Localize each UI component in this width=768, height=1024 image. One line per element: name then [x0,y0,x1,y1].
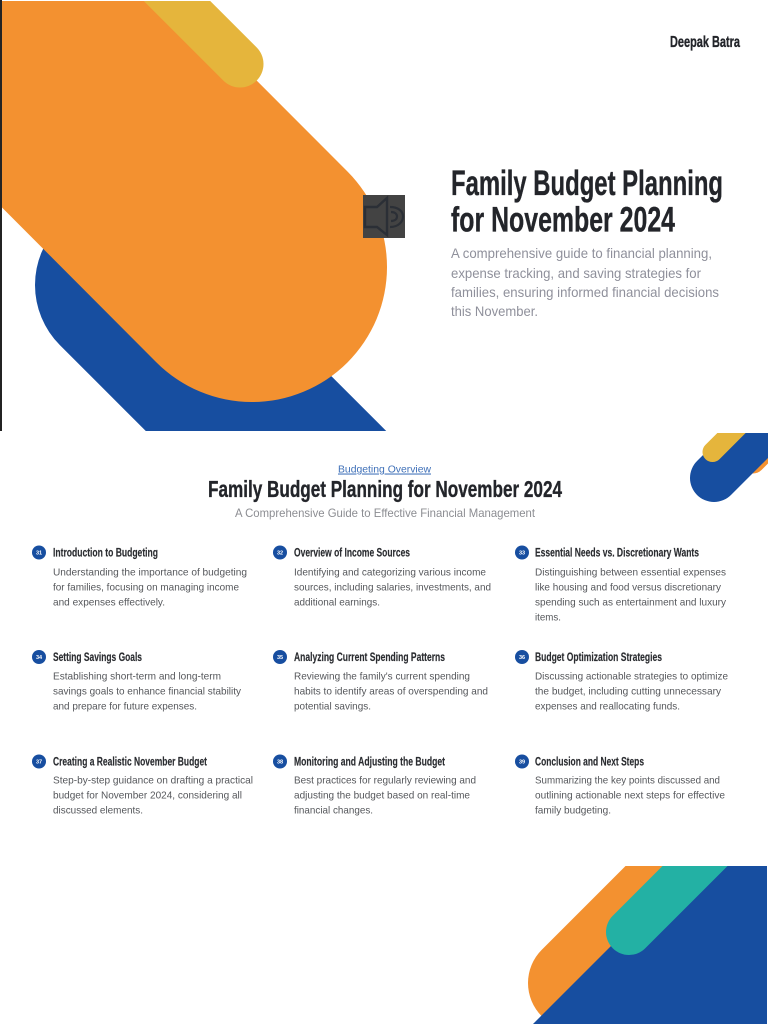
item 7: budget for November 2024, considering all [53,790,242,802]
item 8: Monitoring and Adjusting the Budget [294,754,445,768]
item 3: spending such as entertainment and luxury [535,597,727,609]
item 2 [273,546,491,609]
item 1: 31 [36,550,42,556]
item 1: for families, focusing on managing income [53,582,239,594]
item 1: Introduction to Budgeting [53,546,158,560]
cover subtitle [451,245,719,319]
item 6: 36 [519,655,525,661]
item 5 [273,650,488,713]
eyebrow link: Budgeting Overview [338,464,431,476]
item 5: Analyzing Current Spending Patterns [294,650,445,664]
corner capsules [712,392,768,478]
item 7 [32,754,253,817]
decorative capsules [2,1,387,431]
cover subtitle: A comprehensive guide to financial planning, [451,245,712,261]
item 2: Identifying and categorizing various income [294,567,486,579]
item 4 [32,650,242,713]
item 6 [515,650,728,713]
cover subtitle: expense tracking, and saving strategies for [451,265,701,281]
item 3: 33 [519,550,525,556]
item 3: Distinguishing between essential expenses [535,567,726,579]
item 1 [32,546,247,609]
cover title: for November 2024 [451,200,675,240]
item 6: Discussing actionable strategies to optimize [535,671,728,683]
item 5: potential savings. [294,701,371,713]
item 2: Overview of Income Sources [294,546,410,560]
item 7: 37 [36,760,42,766]
left edge bar [0,0,2,431]
cover subtitle: this November. [451,303,538,319]
item 8: financial changes. [294,805,373,817]
item 7: Creating a Realistic November Budget [53,754,207,768]
item 4: Establishing short-term and long-term [53,671,221,683]
item 8 [273,754,476,817]
item 1: Understanding the importance of budgeting [53,567,247,579]
cover title [451,164,723,240]
item 5: habits to identify areas of overspending and [294,686,488,698]
item 9: family budgeting. [535,805,611,817]
item 7: discussed elements. [53,805,143,817]
item 8: 38 [277,760,283,766]
item 9: Conclusion and Next Steps [535,754,644,768]
item 4: 34 [36,655,43,661]
item 7: Step-by-step guidance on drafting a practical [53,775,253,787]
panel: budgeting overview [32,392,768,817]
item 2: additional earnings. [294,597,380,609]
section heading: Family Budget Planning for November 2024 [208,476,562,502]
item 9 [515,754,725,817]
item 1: and expenses effectively. [53,597,165,609]
item 6: the budget, including cutting unnecessary [535,686,722,698]
item 3: items. [535,612,561,624]
item 2: sources, including salaries, investments, and [294,582,491,594]
item 9: Summarizing the key points discussed and [535,775,720,787]
item 4: savings goals to enhance financial stability [53,686,242,698]
section subtitle: A Comprehensive Guide to Effective Financial Management [235,506,536,520]
item 9: outlining actionable next steps for effective [535,790,725,802]
decorative corner shapes [528,866,767,1024]
panel: cover slide [0,0,740,431]
icon: speaker [363,195,405,238]
item 8: adjusting the budget based on real-time [294,790,470,802]
item 4: Setting Savings Goals [53,650,142,664]
item 6: expenses and reallocating funds. [535,701,680,713]
item 4: and prepare for future expenses. [53,701,197,713]
item 5: 35 [277,655,283,661]
item 9: 39 [519,760,525,766]
item 3 [515,546,727,624]
item 2: 32 [277,550,283,556]
cover subtitle: families, ensuring informed financial decisions [451,284,719,300]
item 6: Budget Optimization Strategies [535,650,662,664]
item 5: Reviewing the family's current spending [294,671,470,683]
item 3: Essential Needs vs. Discretionary Wants [535,546,699,560]
item 8: Best practices for regularly reviewing and [294,775,476,787]
item 3: like housing and food versus discretionary [535,582,722,594]
